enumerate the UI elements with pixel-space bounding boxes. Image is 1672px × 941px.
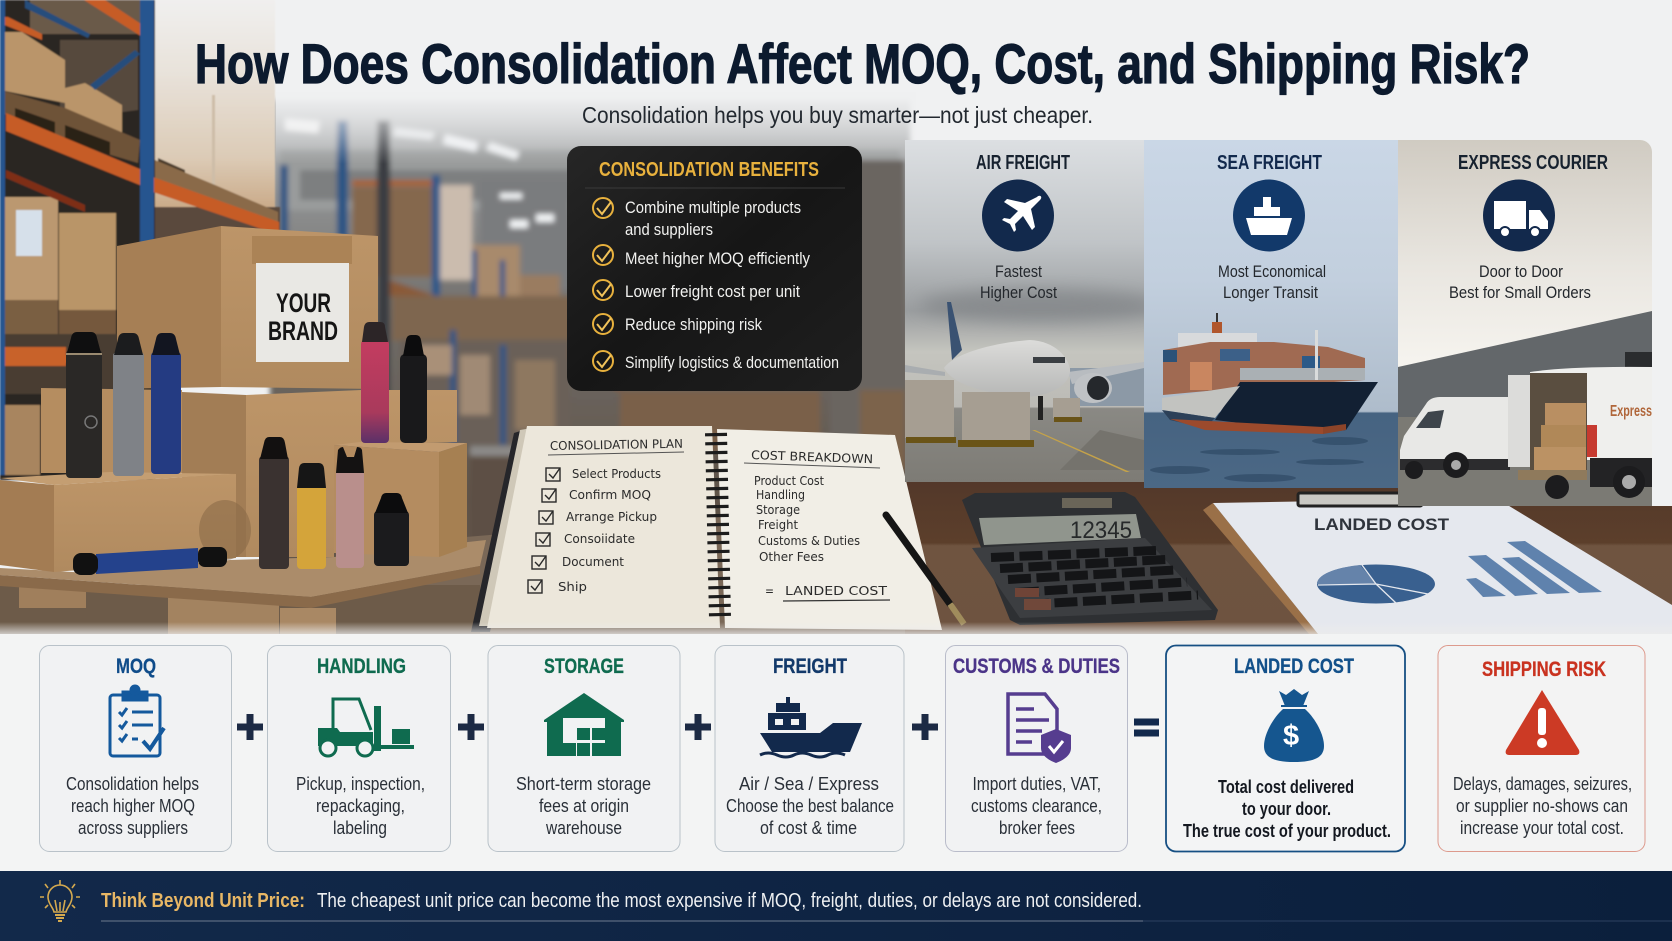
courier vans: Express bbox=[1610, 403, 1652, 420]
brand text: BRAND bbox=[268, 316, 338, 346]
cost breakdown page writing: Product Cost bbox=[754, 474, 824, 488]
plan page writing: Confirm MOQ bbox=[569, 488, 651, 502]
storage text: warehouse bbox=[545, 818, 622, 838]
benefit: risk bbox=[593, 314, 762, 334]
vape devices bbox=[66, 322, 427, 575]
orange beams bbox=[84, 0, 150, 42]
vape: black slim bbox=[400, 335, 427, 443]
customs text: customs clearance, bbox=[971, 796, 1102, 816]
express icon bbox=[1483, 180, 1555, 252]
courier vans bbox=[1400, 367, 1652, 499]
plan page writing: Select Products bbox=[572, 467, 661, 481]
MOQ text: Consolidation helps bbox=[66, 774, 199, 794]
stacked box: middle back bbox=[41, 388, 182, 473]
storage heading: STORAGE bbox=[544, 655, 624, 678]
lower section background bbox=[0, 634, 1672, 871]
spiral binding bbox=[716, 433, 720, 618]
lower shelf contents bbox=[4, 197, 58, 301]
panel: air freight bbox=[905, 140, 1160, 482]
vape: yellow bbox=[297, 463, 326, 569]
vape: black bbox=[66, 332, 102, 478]
clip bbox=[1298, 493, 1422, 506]
customs text bbox=[971, 774, 1102, 838]
icon: clipboard checklist bbox=[110, 686, 164, 756]
MOQ text: reach higher MOQ bbox=[71, 796, 195, 816]
equals sign bbox=[1134, 722, 1159, 733]
notebook bbox=[471, 426, 964, 632]
brand text: YOUR bbox=[276, 288, 331, 318]
plus sign bbox=[237, 714, 263, 740]
card: freight bbox=[715, 646, 904, 852]
report heading: LANDED COST bbox=[1314, 515, 1450, 534]
cardboard boxes and pallet bbox=[0, 226, 486, 634]
sea icon bbox=[1233, 180, 1305, 252]
MOQ text bbox=[66, 774, 199, 838]
risk text bbox=[1453, 774, 1632, 838]
risk text: Delays, damages, seizures, bbox=[1453, 774, 1632, 794]
freight text: Air / Sea / Express bbox=[739, 774, 879, 794]
handling text bbox=[296, 774, 425, 838]
vape: black compact bbox=[374, 493, 409, 566]
cost breakdown page writing: = bbox=[765, 584, 774, 598]
icon: forklift bbox=[318, 699, 414, 756]
freight text: of cost & time bbox=[760, 818, 857, 838]
lower right box bbox=[334, 442, 467, 557]
plan page writing: Consoiidate bbox=[564, 532, 635, 546]
warehouse building bbox=[1398, 311, 1652, 417]
storage text: Short-term storage bbox=[516, 774, 651, 794]
panel: express courier bbox=[1398, 140, 1652, 506]
card: customs and duties bbox=[946, 646, 1128, 852]
cost breakdown page writing: Other Fees bbox=[759, 550, 824, 564]
icon: document with shield bbox=[1008, 694, 1071, 763]
handling text: labeling bbox=[333, 818, 387, 838]
card: storage bbox=[488, 646, 680, 852]
vape: pink red bbox=[361, 322, 389, 443]
calculator bbox=[962, 492, 1218, 625]
express description: Best for Small Orders bbox=[1449, 283, 1591, 302]
handling heading: HANDLING bbox=[317, 655, 406, 678]
plus sign bbox=[912, 714, 938, 740]
sea description: Most Economical bbox=[1218, 262, 1326, 281]
express description bbox=[1449, 262, 1591, 302]
plus sign bbox=[458, 714, 484, 740]
brand label bbox=[256, 263, 349, 362]
card: handling bbox=[268, 646, 450, 852]
container ship bbox=[1162, 313, 1378, 434]
bar chart bbox=[1466, 541, 1602, 597]
air description: Higher Cost bbox=[980, 283, 1057, 302]
floor and wooden table bbox=[300, 0, 1672, 634]
brand text bbox=[268, 288, 338, 346]
card: landed cost bbox=[1166, 646, 1405, 852]
pen bbox=[886, 515, 964, 624]
benefits heading: CONSOLIDATION BENEFITS bbox=[599, 159, 819, 181]
benefit: combine: Combine multiple products bbox=[625, 198, 801, 217]
cost breakdown page writing bbox=[744, 448, 890, 601]
benefit: freight: Lower freight cost per unit bbox=[625, 282, 800, 301]
water texture bbox=[1150, 437, 1368, 482]
air description bbox=[980, 262, 1057, 302]
express heading: EXPRESS COURIER bbox=[1458, 152, 1608, 174]
icon: light bulb bbox=[40, 880, 80, 921]
landed cost text: to your door. bbox=[1242, 799, 1331, 819]
vape: rose bbox=[336, 447, 364, 568]
clipboard with landed cost report bbox=[1203, 493, 1672, 634]
report sheet bbox=[1213, 498, 1672, 634]
vape: dark brown bbox=[259, 437, 289, 569]
customs text: broker fees bbox=[999, 818, 1075, 838]
calculator display bbox=[979, 514, 1141, 545]
landed cost text: The true cost of your product. bbox=[1183, 821, 1391, 841]
benefit: logistics bbox=[593, 351, 839, 372]
stacked box: center bbox=[182, 390, 457, 557]
panel: consolidation benefits bbox=[567, 146, 862, 391]
icon: warning triangle bbox=[1506, 690, 1579, 755]
risk text: or supplier no-shows can bbox=[1456, 796, 1628, 816]
cost breakdown page writing: Storage bbox=[756, 503, 800, 517]
handling text: repackaging, bbox=[316, 796, 405, 816]
pie chart bbox=[1317, 564, 1435, 604]
subtitle: Consolidation helps you buy smarter—not just cheaper. bbox=[582, 102, 1093, 128]
handling text: Pickup, inspection, bbox=[296, 774, 425, 794]
cargo pallets bbox=[905, 380, 1082, 447]
plus sign bbox=[685, 714, 711, 740]
scene bottom fade bbox=[0, 622, 1672, 634]
vape: blue bbox=[151, 333, 181, 474]
benefit: MOQ bbox=[593, 245, 810, 268]
blue uprights bbox=[140, 0, 154, 245]
cost breakdown page writing: Customs & Duties bbox=[758, 534, 860, 548]
icon: cargo ship bbox=[760, 697, 862, 757]
MOQ text: across suppliers bbox=[78, 818, 188, 838]
air heading: AIR FREIGHT bbox=[976, 152, 1070, 174]
benefit: combine: and suppliers bbox=[625, 220, 713, 239]
cost breakdown page writing: Handling bbox=[756, 488, 805, 502]
icon: money bag bbox=[1264, 689, 1324, 762]
landed cost text bbox=[1183, 777, 1391, 841]
benefit: combine bbox=[593, 198, 801, 239]
plan page writing: Ship bbox=[558, 580, 587, 594]
warehouse racks on the left bbox=[0, 0, 280, 480]
plan page writing: Arrange Pickup bbox=[566, 510, 657, 524]
tip label: Think Beyond Unit Price: bbox=[101, 890, 305, 912]
MOQ heading: MOQ bbox=[116, 655, 156, 678]
freight heading: FREIGHT bbox=[773, 655, 847, 678]
sea description: Longer Transit bbox=[1223, 283, 1318, 302]
upper shelf contents bbox=[30, 0, 140, 34]
vape: grey bbox=[113, 333, 144, 476]
icon: money bag: $ bbox=[1283, 720, 1299, 752]
footer banner bbox=[0, 871, 1672, 941]
air icon bbox=[982, 180, 1054, 252]
icon: warehouse bbox=[544, 693, 624, 756]
risk text: increase your total cost. bbox=[1460, 818, 1624, 838]
card: shipping risk bbox=[1438, 646, 1645, 852]
card: MOQ bbox=[40, 646, 232, 852]
express description: Door to Door bbox=[1479, 262, 1563, 281]
landed cost text: Total cost delivered bbox=[1218, 777, 1354, 797]
cost breakdown page writing: LANDED COST bbox=[785, 584, 888, 598]
benefit: MOQ: Meet higher MOQ efficiently bbox=[625, 249, 810, 268]
customs text: Import duties, VAT, bbox=[972, 774, 1101, 794]
risk heading: SHIPPING RISK bbox=[1482, 658, 1606, 681]
air cargo plane bbox=[905, 302, 1144, 420]
plan page writing bbox=[528, 437, 684, 594]
landed cost heading: LANDED COST bbox=[1234, 655, 1354, 678]
wooden pallet bbox=[0, 540, 486, 634]
sea heading: SEA FREIGHT bbox=[1217, 152, 1322, 174]
freight text: Choose the best balance bbox=[726, 796, 894, 816]
cost breakdown page writing: Freight bbox=[758, 518, 798, 532]
vape: blue lying bbox=[73, 547, 227, 575]
storage text: fees at origin bbox=[539, 796, 629, 816]
box with brand label bbox=[117, 226, 378, 389]
photo scene: warehouse background bbox=[270, 92, 916, 634]
benefit: logistics: Simplify logistics & documentation bbox=[625, 353, 839, 372]
plan page writing: Document bbox=[562, 555, 624, 569]
notebook right page bbox=[717, 429, 942, 630]
air description: Fastest bbox=[995, 262, 1042, 281]
calculator keys bbox=[991, 550, 1198, 604]
calculator reading: 12345 bbox=[1070, 517, 1132, 544]
benefit: risk: Reduce shipping risk bbox=[625, 315, 762, 334]
lower left box bbox=[0, 472, 251, 572]
sea description bbox=[1218, 262, 1326, 302]
freight text bbox=[726, 774, 894, 838]
storage text bbox=[516, 774, 651, 838]
plan page writing: CONSOLIDATION PLAN bbox=[550, 437, 683, 453]
cost breakdown page writing: COST BREAKDOWN bbox=[751, 448, 873, 466]
notebook left page bbox=[487, 426, 720, 628]
tip text: The cheapest unit price can become the most expensive if MOQ, freight, duties, or delays are not considered. bbox=[317, 890, 1142, 912]
customs heading: CUSTOMS & DUTIES bbox=[953, 655, 1120, 678]
panel: sea freight bbox=[1144, 140, 1398, 488]
